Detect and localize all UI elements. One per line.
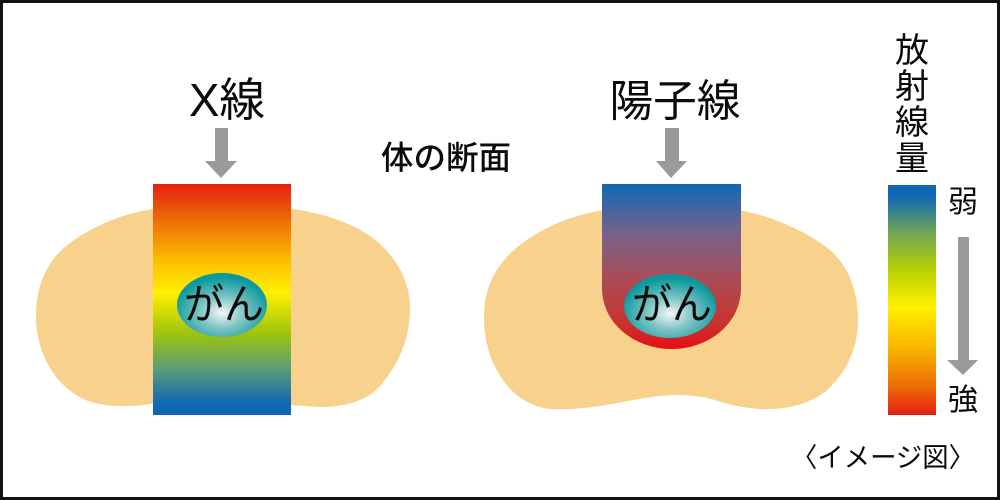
- panel: proton beam: [484, 77, 858, 409]
- heading: body cross-section: 体の断面: [381, 140, 511, 176]
- tumor label: がん: [184, 281, 264, 328]
- arrow: X-ray direction: [205, 128, 237, 178]
- legend title: [895, 32, 929, 178]
- label: strong: 強: [948, 384, 978, 417]
- heading: proton beam: 陽子線: [610, 77, 740, 126]
- tumor shape: [624, 274, 716, 338]
- beam: proton dose: [602, 184, 741, 349]
- legend title: 線: [895, 104, 929, 142]
- body cross-section: proton: [484, 210, 858, 409]
- label: weak: 弱: [948, 186, 978, 219]
- legend title: 放: [895, 32, 929, 70]
- tumor shape: [177, 273, 267, 337]
- beam: X-ray dose: [153, 184, 291, 415]
- arrow: weak to strong: [947, 237, 978, 375]
- body cross-section: X-ray: [36, 208, 410, 407]
- note: image diagram: 〈イメージ図〉: [791, 443, 975, 473]
- arrow: proton direction: [656, 128, 687, 178]
- legend title: 射: [895, 68, 929, 106]
- tumor: X-ray: [177, 273, 267, 337]
- legend: radiation dose: [888, 32, 978, 417]
- heading: X-ray: X線: [189, 74, 265, 126]
- legend title: 量: [895, 140, 929, 178]
- panel: X-ray: [36, 74, 410, 415]
- tumor: proton: [624, 274, 716, 338]
- color scale: [888, 185, 936, 415]
- tumor label: がん: [632, 281, 712, 328]
